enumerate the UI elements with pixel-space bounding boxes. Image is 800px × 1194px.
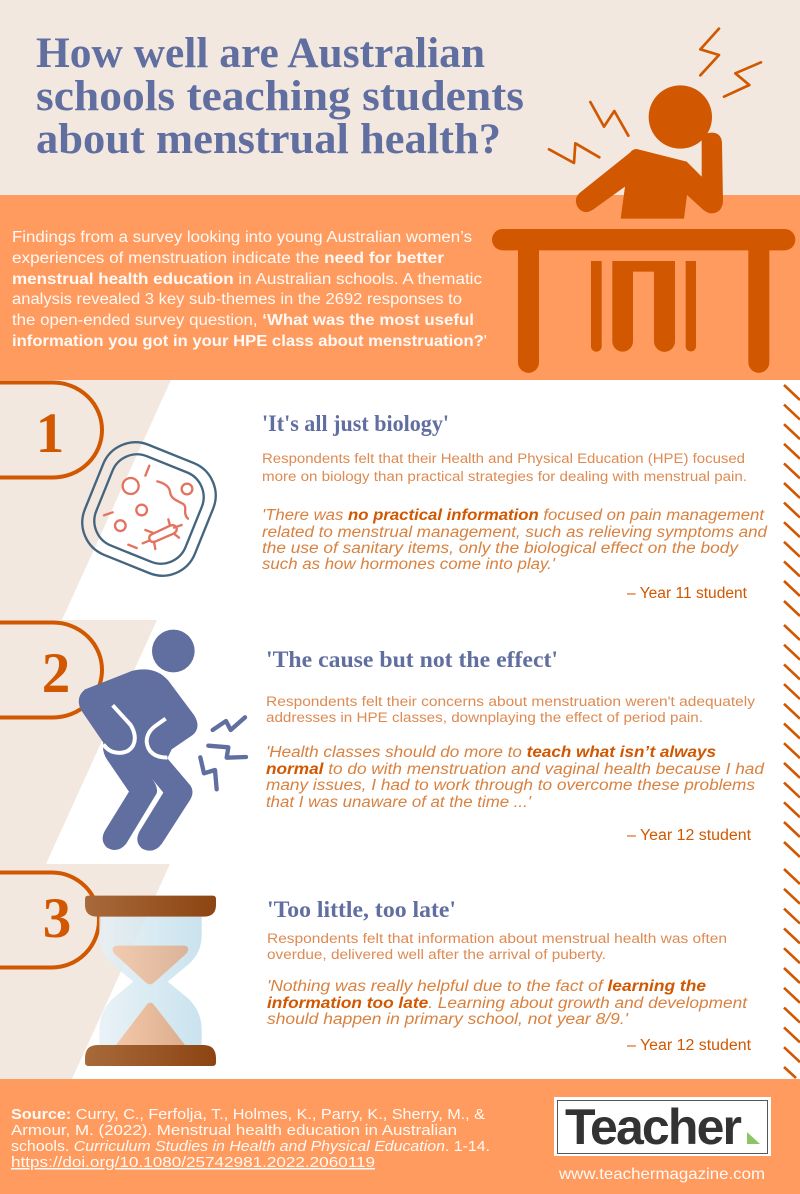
panel: intro (0, 195, 800, 380)
title: about menstrual health? (36, 115, 501, 163)
description (266, 694, 756, 726)
quote: the use of sanitary items, only the biological effect on the body (262, 540, 739, 557)
panel: section 1 (0, 382, 767, 602)
panel: section 2 (0, 622, 764, 851)
intro text (12, 229, 487, 350)
description: Respondents felt that information about menstrual health was often (267, 931, 727, 947)
description: Respondents felt their concerns about menstruation weren't adequately (266, 694, 756, 710)
source citation (11, 1106, 490, 1171)
attribution: – Year 11 student (627, 585, 748, 602)
description: Respondents felt that their Health and Physical Education (HPE) focused (262, 451, 745, 467)
description (267, 931, 727, 963)
number tab 2 (0, 622, 102, 718)
number tab 3: 3 (43, 887, 71, 950)
number tab 1 (0, 382, 102, 478)
description: overdue, delivered well after the arrival of puberty. (267, 947, 606, 963)
title (36, 29, 524, 163)
quote (266, 744, 764, 811)
description (262, 451, 747, 485)
heading: 'The cause but not the effect' (266, 647, 558, 672)
heading: 'It's all just biology' (262, 411, 449, 436)
intro text: analysis revealed 3 key sub-themes in the 2692 responses to (12, 291, 462, 308)
source citation: https://doi.org/10.1080/25742981.2022.2060119 (11, 1154, 375, 1171)
quote: should happen in primary school, not year 8/9.' (267, 1011, 629, 1028)
intro text: menstrual health education in Australian schools. A thematic (12, 271, 482, 288)
icon: person with stomach pain (79, 630, 246, 851)
attribution: – Year 12 student (627, 827, 752, 844)
intro text: the open-ended survey question, ‘What was the most useful (12, 312, 474, 329)
panel: footer (0, 1079, 800, 1194)
source citation: Source: Curry, C., Ferfolja, T., Holmes, K., Parry, K., Sherry, M., & (11, 1106, 485, 1123)
quote: 'Nothing was really helpful due to the fact of learning the (267, 978, 706, 995)
attribution: – Year 12 student (627, 1037, 752, 1054)
quote: many issues, I had to work through to overcome these problems (266, 777, 755, 794)
hatched right border (784, 385, 800, 1078)
number tab 3 (0, 872, 99, 968)
quote: 'Health classes should do more to teach what isn’t always (266, 744, 716, 761)
icon: student with headache at desk (492, 29, 795, 373)
intro text: information you got in your HPE class about menstruation? ' (12, 333, 487, 350)
panel: section 3 (0, 872, 752, 1066)
title: How well are Australian (36, 29, 485, 77)
quote (262, 507, 767, 573)
panel: header (0, 0, 800, 196)
quote: such as how hormones come into play.' (262, 556, 556, 573)
description: more on biology than practical strategies for dealing with menstrual pain. (262, 469, 747, 485)
intro text: experiences of menstruation indicate the need for better (12, 250, 444, 267)
icon: hourglass (85, 896, 216, 1066)
number tab 2: 2 (42, 642, 70, 705)
quote: related to menstrual management, such as relieving symptoms and (262, 524, 767, 541)
description: addresses in HPE classes, downplaying the effect of period pain. (266, 710, 703, 726)
panel: section backgrounds (0, 380, 171, 1079)
logo: Teacher: Teacher (565, 1099, 742, 1155)
heading: 'Too little, too late' (267, 897, 456, 922)
quote: normal to do with menstruation and vaginal health because I had (266, 761, 764, 778)
website url: www.teachermagazine.com (558, 1166, 765, 1183)
quote: information too late . Learning about growth and development (267, 995, 748, 1012)
quote: 'There was no practical information focused on pain management (262, 507, 765, 524)
number tab 1: 1 (36, 402, 64, 465)
source citation: Armour, M. (2022). Menstrual health education in Australian (11, 1122, 457, 1139)
intro text: Findings from a survey looking into young Australian women’s (12, 229, 472, 246)
source citation: schools. Curriculum Studies in Health and Physical Education . 1-14. (11, 1138, 490, 1155)
icon: microbes in petri dish (72, 432, 226, 586)
title: schools teaching students (36, 72, 524, 120)
quote (267, 978, 748, 1028)
quote: that I was unaware of at the time ...' (266, 794, 532, 811)
